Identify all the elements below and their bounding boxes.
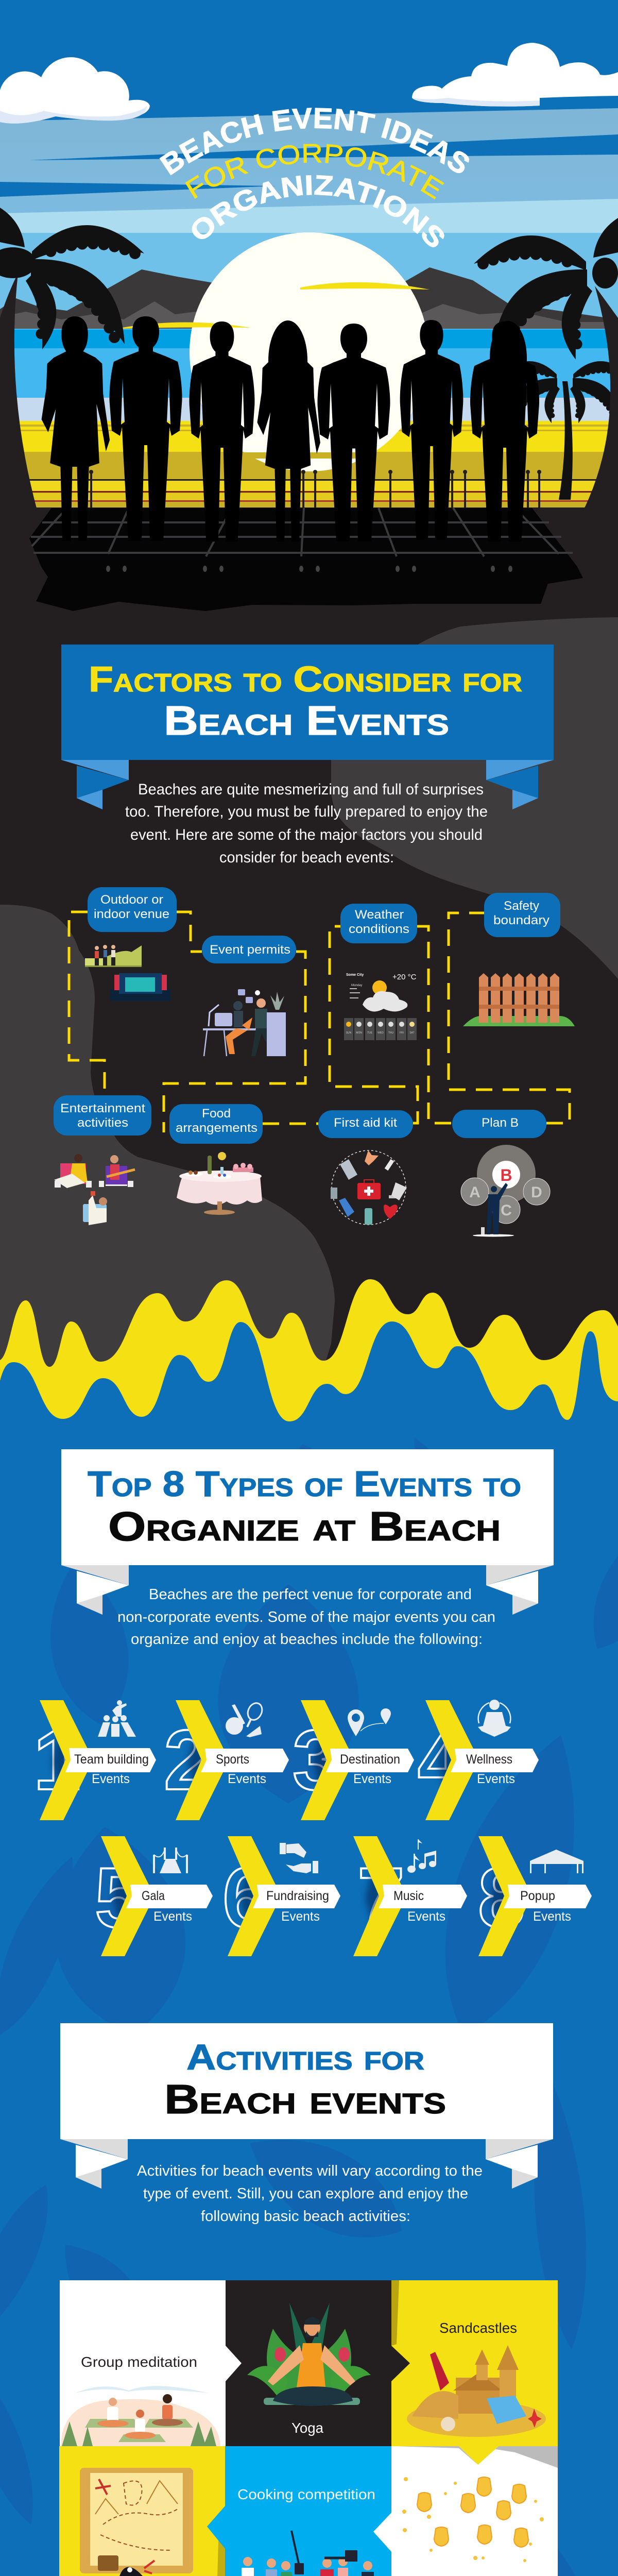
icon: weather forecast: SUN [346,1031,352,1035]
icon: sports gear [226,1701,265,1737]
top 8 intro text: non-corporate events. Some of the major events you can [117,1609,495,1625]
icon: weather forecast: THU [388,1031,394,1035]
seven people silhouettes [42,316,539,541]
main title on arcs: ORGANIZATIONS [192,175,444,247]
cell: group meditation: Group meditation [81,2354,197,2370]
cell: sandcastles [391,2280,558,2446]
event 2: sports [164,1700,289,1820]
activities intro text: type of event. Still, you can explore and enjoy the [143,2185,468,2202]
icon: weather forecast: +20 °C [392,973,417,981]
pill: food arrangements: arrangements [176,1121,258,1135]
event 3: destination: Events [353,1772,391,1786]
banner: activities: Activities for [186,2037,424,2077]
event 1: team building: Events [92,1772,130,1786]
cloud left [0,57,150,124]
pill: first aid kit: First aid kit [334,1116,397,1130]
icon: plan b: C [501,1202,512,1219]
background leaves blue [0,1431,618,2576]
icon: event permits workers [203,989,286,1056]
event 8: popup: Events [533,1909,571,1924]
event 8: popup [478,1836,592,1956]
pill: outdoor or indoor venue [88,887,177,932]
icon: plan b [461,1145,550,1236]
factors intro text: too. Therefore, you must be fully prepared to enjoy the [125,803,488,820]
factors intro text [125,781,488,866]
cell: yoga: Yoga [291,2420,323,2436]
pill: outdoor or indoor venue: Outdoor or [100,893,163,907]
banner: factors to consider: Beach Events [164,698,449,743]
main title on arcs: FOR CORPORATE [185,144,444,199]
illustration: sandcastle [407,2345,546,2437]
cell: cooking competition: Cooking competition [237,2486,375,2502]
pill: first aid kit [318,1110,413,1138]
event 3: destination: 3 [293,1713,340,1807]
yellow wave [0,1279,618,1432]
icon: plan b: B [500,1166,512,1184]
pill: weather conditions: Weather [355,908,404,922]
blue section background [0,1437,618,2576]
cell: treasure hunt [59,2446,225,2576]
banner: activities [60,2023,553,2189]
event 4: wellness: 4 [418,1713,465,1807]
event 7: music: 7 [357,1850,405,1945]
pill: entertainment activities: activities [77,1116,128,1130]
event 6: fundraising: Fundraising [266,1889,329,1903]
pill: event permits [202,936,296,963]
icon: weather forecast: WED [377,1031,384,1035]
event 5: gala: 5 [95,1850,142,1945]
icon: weather forecast: TUE [367,1031,373,1035]
banner: top 8 types [61,1449,554,1615]
icon: weather forecast: FRI [400,1031,404,1035]
banner: activities: Beach events [164,2076,446,2122]
pill: food arrangements: Food [202,1107,231,1121]
lighter dark blobs [0,617,618,1370]
pill: entertainment activities [54,1095,151,1136]
activities intro text: following basic beach activities: [201,2208,410,2225]
dark section background [0,507,618,1435]
icon: red carpet ropes [153,1848,188,1873]
cell: yoga [226,2280,410,2446]
mountains [0,267,618,330]
cell: lantern setting [373,2446,558,2576]
pill: safety boundary: boundary [493,913,550,927]
icon: plan b: D [531,1184,542,1201]
event 6: fundraising: 6 [222,1850,270,1945]
icon: indoor stage [110,973,170,1001]
event 3: destination [293,1700,414,1820]
event 4: wellness: Events [477,1772,515,1786]
illustration: treasure map [80,2468,193,2576]
activities intro text: Activities for beach events will vary according to the [137,2163,483,2179]
event 8: popup: Popup [520,1889,555,1903]
illustration: floating lanterns [402,2477,544,2562]
event 2: sports: Sports [216,1752,249,1767]
event 2: sports: 2 [164,1713,211,1807]
event 7: music: Events [407,1909,445,1924]
icon: popup tent [530,1850,583,1873]
icon: hand giving coin [280,1843,318,1873]
pill: plan b [452,1110,546,1138]
icon: wooden fence [463,973,575,1026]
event 2: sports: Events [228,1772,266,1786]
pill: safety boundary: Safety [504,899,539,913]
pill: entertainment activities: Entertainment [60,1101,145,1115]
event 4: wellness [418,1700,539,1820]
icon: first aid kit [331,1150,407,1225]
icon: plan b: A [469,1184,480,1201]
activities intro text [137,2163,483,2225]
deck floor [29,508,583,611]
illustration: cooks team [238,2531,382,2576]
event 8: popup: 8 [478,1850,525,1945]
pill: outdoor or indoor venue: indoor venue [94,907,169,921]
yellow streak clouds [122,282,430,329]
top 8 intro text: organize and enjoy at beaches include the following: [131,1631,483,1648]
main title on arcs [160,108,469,247]
small palm [501,361,618,500]
sea and sand [0,329,618,509]
event 5: gala [95,1836,213,1956]
illustration: yoga man [247,2303,371,2406]
event 7: music [353,1836,467,1956]
blue wave [0,1321,618,1443]
pill: food arrangements [169,1104,263,1144]
pill: weather conditions: conditions [349,922,409,936]
factors intro text: Beaches are quite mesmerizing and full of surprises [138,781,484,798]
top 8 intro text: Beaches are the perfect venue for corporate and [149,1586,472,1603]
palm right [474,218,618,526]
cell: sandcastles: Sandcastles [439,2320,517,2336]
event 7: music: Music [393,1889,424,1903]
event 1: team building: Team building [74,1752,149,1767]
icon: entertainment musicians [54,1154,135,1225]
dashed connectors [69,912,570,1132]
banner: top 8 types: Organize at Beach [108,1503,501,1549]
pill: safety boundary [484,893,560,937]
icon: weather forecast: SAT [409,1031,415,1035]
pill: event permits: Event permits [210,943,290,957]
event 6: fundraising: Events [281,1909,320,1924]
event 5: gala: Gala [142,1889,165,1903]
icon: outdoor picnic [85,945,142,967]
event 1: team building [33,1700,156,1820]
banner: top 8 types: Top 8 Types of Events to [88,1464,521,1504]
main title on arcs: BEACH EVENT IDEAS [160,108,469,175]
pill: plan b: Plan B [482,1116,519,1130]
cloud right [412,43,618,107]
banner: factors to consider [61,645,554,809]
event 6: fundraising [222,1836,340,1956]
illustration: meditating group [61,2386,220,2446]
palm left [0,208,144,514]
cell: cooking competition [207,2446,391,2576]
event 3: destination: Destination [340,1752,400,1767]
icon: music notes [407,1839,436,1873]
top 8 intro text [117,1586,495,1648]
icon: weather forecast [344,973,417,1040]
hero beach scene [0,0,618,509]
factors intro text: event. Here are some of the major factors you should [130,826,483,843]
sun [190,232,428,471]
railing posts [89,470,541,508]
icon: meditation [478,1700,511,1737]
icon: weather forecast: MON [356,1031,362,1035]
icon: food table [177,1152,262,1215]
icon: map pins [348,1708,391,1736]
banner: factors to consider: Factors to Consider for [89,659,522,699]
factors intro text: consider for beach events: [219,849,394,866]
event 4: wellness: Wellness [466,1752,512,1767]
pill: weather conditions [340,904,417,943]
icon: weather forecast: Monday [351,984,362,987]
icon: weather forecast: Some City [346,973,364,977]
cell: group meditation [60,2280,242,2446]
event 5: gala: Events [153,1909,192,1924]
icon: team pyramid [98,1700,136,1737]
event 1: team building: 1 [33,1713,81,1807]
